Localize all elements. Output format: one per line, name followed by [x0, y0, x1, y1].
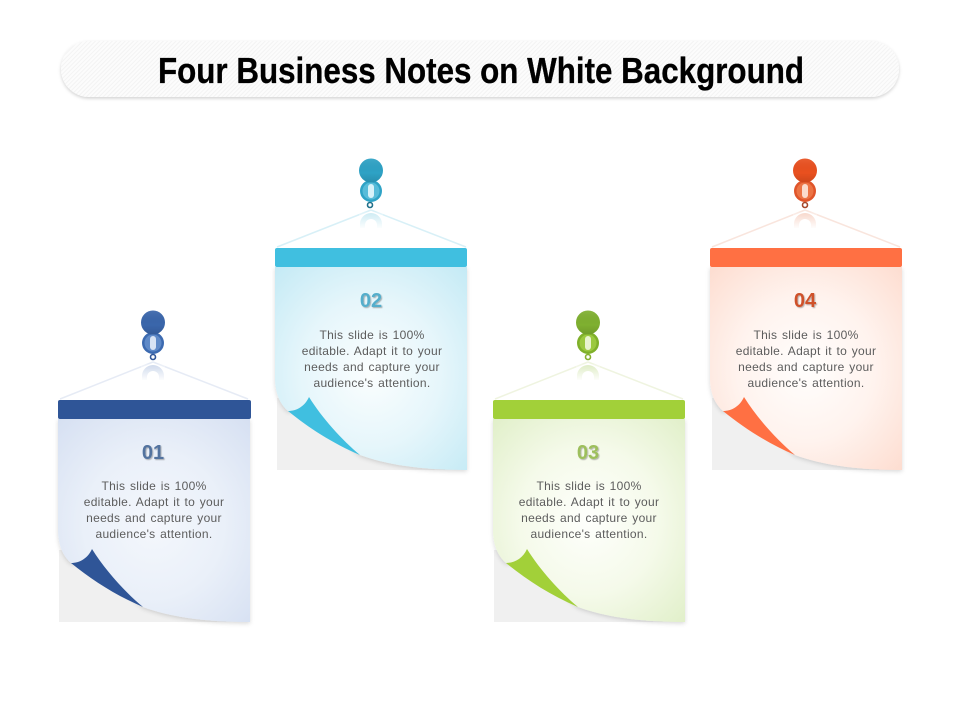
- hanging strings: [495, 362, 683, 399]
- header bar: [710, 248, 902, 267]
- number: 01: [142, 442, 164, 464]
- header bar: [58, 400, 251, 419]
- number: 03: [577, 442, 599, 464]
- body text: needs and capture your: [304, 360, 440, 374]
- body text: editable. Adapt it to your: [736, 344, 876, 358]
- note 1: [58, 310, 251, 622]
- body text: This slide is 100%: [101, 479, 207, 493]
- body text: audience's attention.: [747, 376, 865, 390]
- pushpin: [141, 310, 165, 381]
- body text: editable. Adapt it to your: [84, 495, 224, 509]
- body text: editable. Adapt it to your: [302, 344, 442, 358]
- body text: This slide is 100%: [536, 479, 642, 493]
- body text: audience's attention.: [313, 376, 431, 390]
- number: 04: [794, 290, 817, 312]
- page curl: [506, 549, 578, 607]
- page curl: [288, 397, 360, 455]
- body text: editable. Adapt it to your: [519, 495, 659, 509]
- body text: This slide is 100%: [753, 328, 859, 342]
- body text: This slide is 100%: [319, 328, 425, 342]
- hanging strings: [277, 210, 466, 247]
- pushpin: [793, 158, 817, 229]
- number: 02: [360, 290, 382, 312]
- back page: [59, 550, 250, 622]
- paper: [58, 419, 250, 622]
- header bar: [493, 400, 685, 419]
- body text: audience's attention.: [95, 527, 213, 541]
- body text: needs and capture your: [86, 511, 222, 525]
- hanging strings: [712, 210, 900, 247]
- body text: audience's attention.: [530, 527, 648, 541]
- back page: [712, 398, 902, 470]
- pushpin: [359, 158, 383, 229]
- body text: needs and capture your: [738, 360, 874, 374]
- body text: needs and capture your: [521, 511, 657, 525]
- back page: [494, 550, 685, 622]
- page curl: [71, 549, 143, 607]
- note 4: [710, 158, 902, 470]
- paper: [275, 267, 467, 470]
- back page: [277, 398, 467, 470]
- note 2: [275, 158, 467, 470]
- header bar: [275, 248, 467, 267]
- paper: [710, 267, 902, 470]
- page curl: [723, 397, 795, 455]
- pushpin: [576, 310, 600, 381]
- title banner: [61, 41, 899, 97]
- hanging strings: [60, 362, 248, 399]
- paper: [493, 419, 685, 622]
- note 3: [493, 310, 685, 622]
- title: Four Business Notes on White Background: [158, 50, 804, 91]
